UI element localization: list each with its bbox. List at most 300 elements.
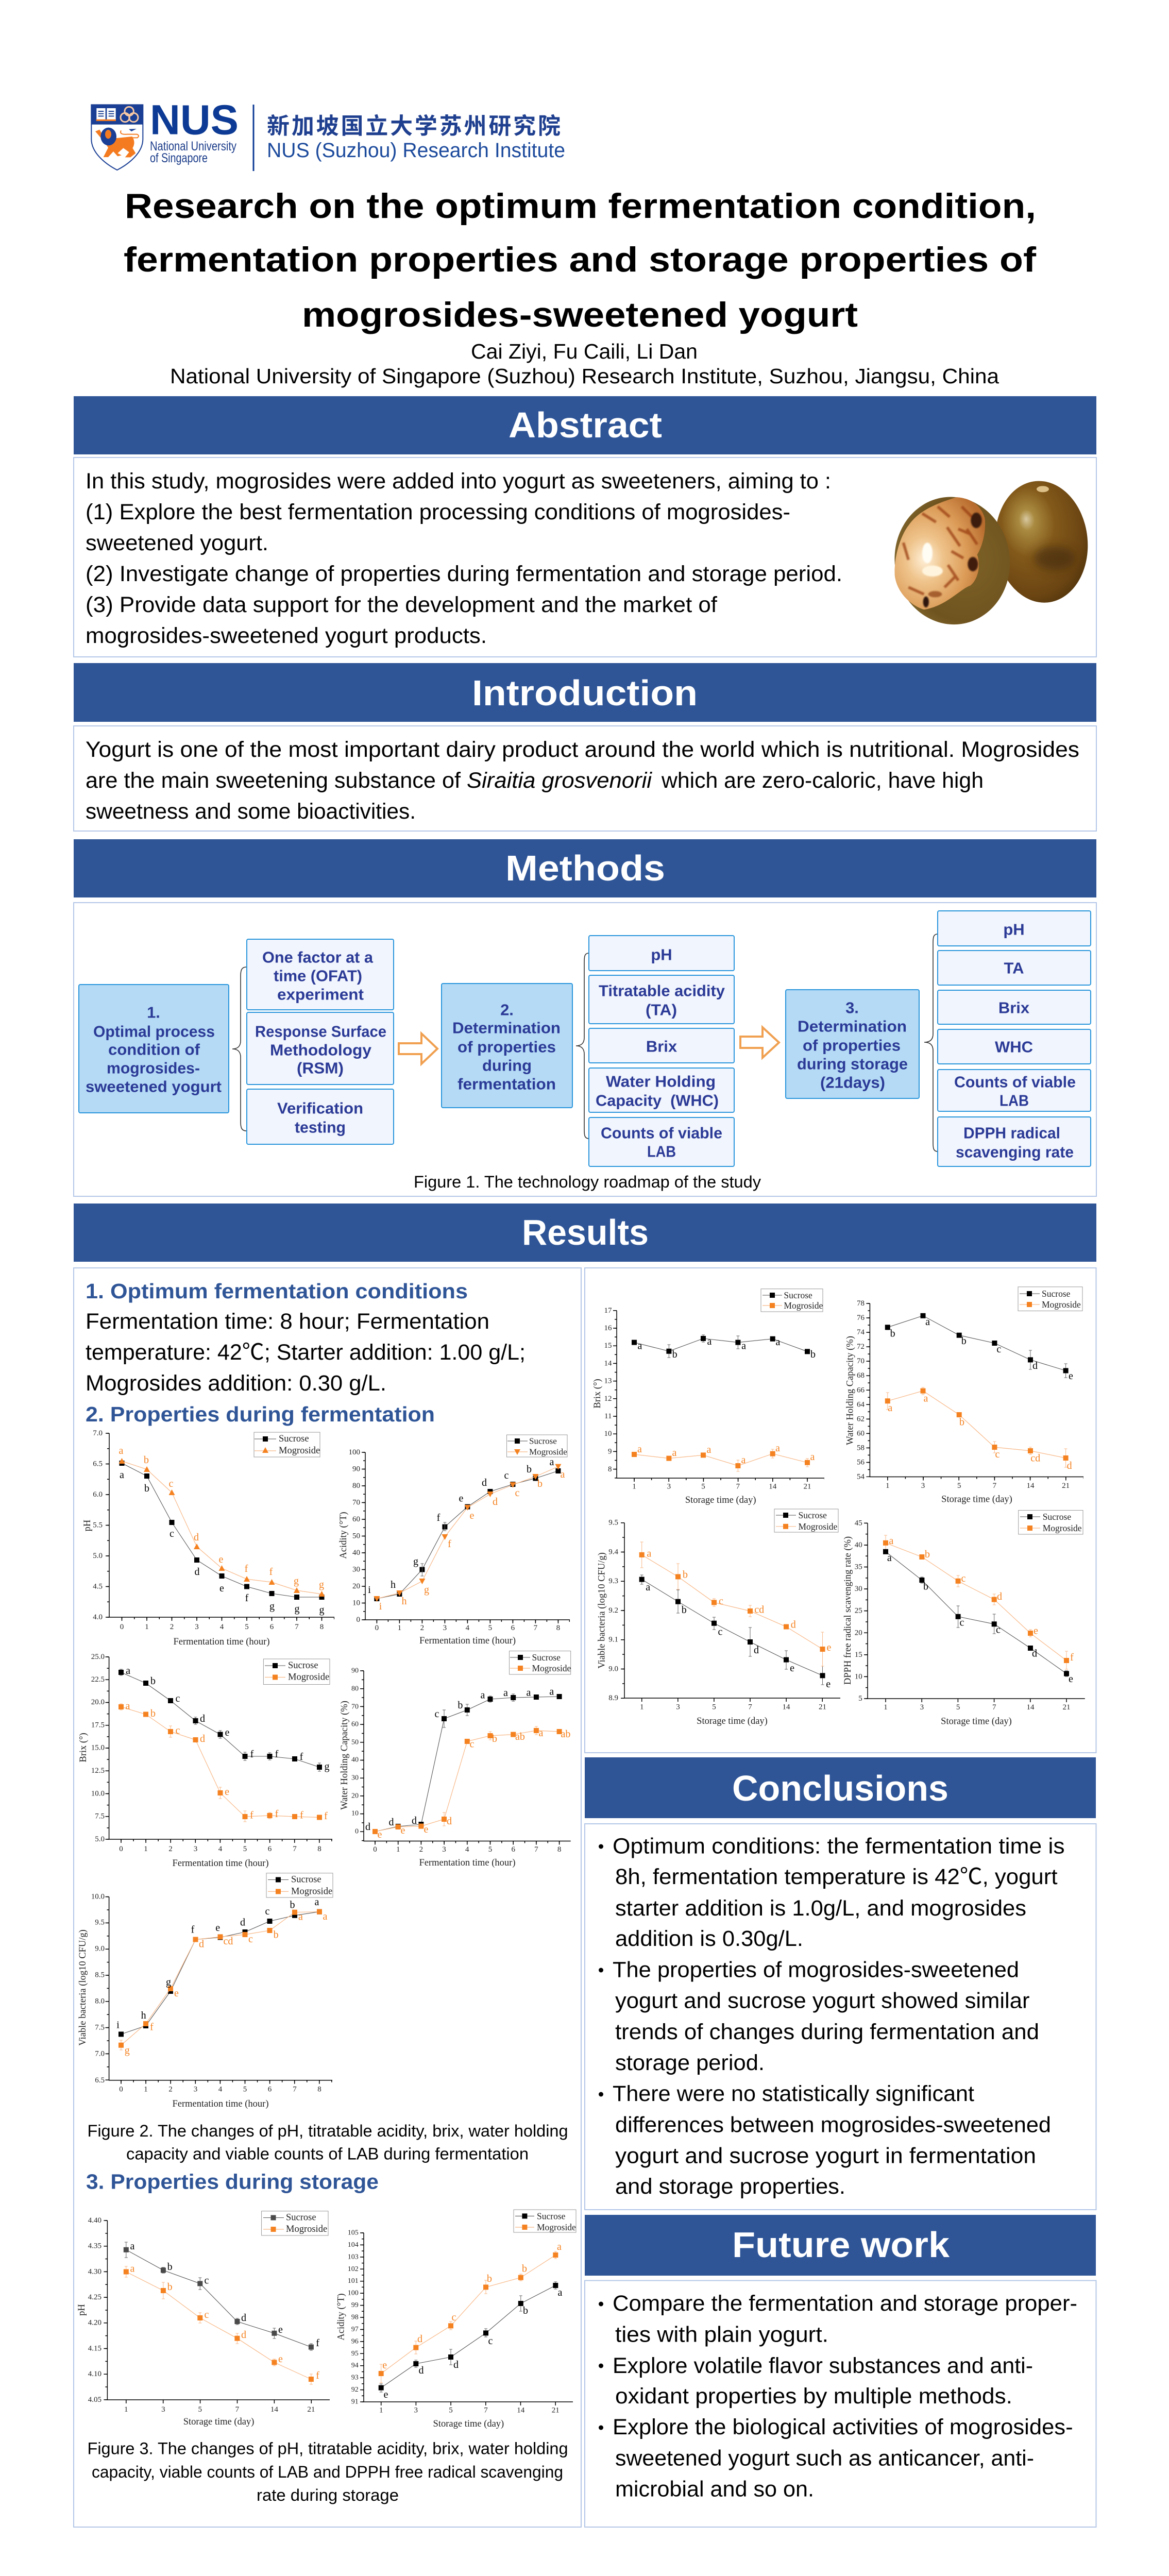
significance letters: c (265, 1906, 270, 1917)
axis labels: 5 (858, 1694, 862, 1703)
axis labels: 4 (218, 2086, 223, 2094)
significance letters: c (452, 2312, 456, 2323)
significance letters: b (167, 2281, 173, 2293)
chart: viable bacteria during fermentation (78, 1873, 333, 2109)
axis labels: 4 (466, 1624, 470, 1632)
axis labels: 7 (295, 1623, 299, 1631)
axis labels: 14 (604, 1359, 612, 1367)
axis labels: 4 (465, 1845, 469, 1854)
significance letters: g (295, 1603, 300, 1615)
axis labels: 10.0 (91, 1790, 105, 1798)
flow box 1: optimal process condition: mogrosides- (107, 1059, 200, 1077)
future work bullet list: Explore the biological activities of mogrosides- (613, 2415, 1073, 2439)
axis labels: 22.5 (91, 1675, 105, 1684)
axis labels: 80 (352, 1482, 360, 1490)
axis labels: DPPH free radical scavenging rate (%) (843, 1536, 853, 1685)
future work bullet list: Explore volatile flavor substances and anti- (613, 2353, 1033, 2378)
axis labels: 6 (268, 2086, 272, 2094)
chart: DPPH radical scavenging rate during storage (843, 1511, 1085, 1727)
significance letters: a (315, 1896, 319, 1908)
mogroside series (888, 1391, 1066, 1458)
flow box 1: optimal process condition: sweetened yogurt (86, 1078, 222, 1095)
axis labels: 68 (857, 1371, 865, 1380)
axis labels: 5.5 (93, 1521, 103, 1529)
box: water holding capacity (589, 1068, 734, 1112)
axis labels: 98 (351, 2313, 359, 2321)
axis labels: 25.0 (91, 1653, 105, 1661)
significance letters: a (557, 2241, 562, 2252)
legend: Mogroside (799, 1521, 838, 1532)
sucrose series (642, 1580, 822, 1675)
axis labels: 72 (857, 1343, 865, 1351)
axis labels (597, 1519, 826, 1726)
figure 3 caption: rate during storage (257, 2486, 399, 2504)
axis labels: 58 (857, 1444, 865, 1452)
significance letters: c (176, 1693, 180, 1704)
significance letters: c (960, 1617, 964, 1629)
conclusions bullet list: and storage properties. (615, 2174, 845, 2199)
conclusions bullet list: yogurt and sucrose yogurt showed similar (615, 1989, 1029, 2013)
axis labels: 14 (1026, 1703, 1035, 1711)
axis labels: 30 (855, 1585, 862, 1593)
significance letters: b (492, 1733, 497, 1744)
legend (263, 1659, 330, 1685)
significance letters: d (241, 2329, 246, 2341)
axis labels: 1 (640, 1703, 643, 1711)
axis labels: 17 (604, 1307, 612, 1315)
axis labels: 70 (857, 1357, 865, 1365)
significance letters: a (638, 1341, 642, 1352)
axis labels: 6.5 (95, 2076, 105, 2084)
icon: luo han guo fruit (886, 477, 1094, 632)
axis labels: Fermentation time (hour) (419, 1636, 516, 1646)
significance letters: a (549, 1686, 554, 1697)
axis labels (78, 1893, 321, 2109)
axis labels: 64 (857, 1400, 865, 1409)
significance letters (365, 1686, 570, 1840)
significance letters: c (435, 1708, 439, 1720)
significance letters: a (503, 1687, 508, 1699)
significance letters: f (250, 1749, 254, 1760)
significance letters: i (379, 1601, 382, 1612)
axis labels: Fermentation time (hour) (172, 2099, 269, 2109)
legend: Mogroside (537, 2222, 576, 2232)
significance letters (119, 1445, 325, 1616)
flow box 1: optimal process condition: Optimal process (93, 1022, 215, 1041)
significance letters: e (225, 1727, 230, 1738)
abstract text: (1) Explore the best fermentation processing conditions of mogrosides- (86, 500, 790, 524)
box: counts storage (938, 1070, 1091, 1111)
panel: Conclusions heading: Conclusions (732, 1768, 948, 1808)
axis labels: 8.5 (95, 1971, 105, 1979)
significance letters: b (150, 1675, 156, 1687)
box: Brix (589, 1028, 734, 1063)
flow box 3: determination during storage: (21days) (820, 1074, 885, 1091)
logo: NUS (Suzhou) Research Institute (91, 97, 565, 171)
axis labels: 100 (348, 2290, 359, 2297)
mogroside series (121, 1707, 319, 1818)
significance letters: i (368, 1584, 371, 1596)
axis labels: 12.5 (91, 1767, 105, 1775)
axis labels: pH (77, 2304, 87, 2316)
axis labels: 9.5 (95, 1919, 105, 1927)
flow box 2: determination during fermentation: fermentation (458, 1075, 556, 1093)
axis labels: 7 (993, 1482, 997, 1490)
box: DPPH storage: DPPH radical (963, 1124, 1060, 1142)
significance letters: a (775, 1443, 780, 1454)
axis labels: 4.35 (88, 2242, 101, 2250)
axis labels: 7 (484, 2406, 488, 2414)
axis labels: 60 (351, 1721, 359, 1728)
box: Response Surface Methodology: (RSM) (297, 1059, 344, 1077)
axis labels: 7 (736, 1483, 740, 1491)
figure 2 caption (88, 2122, 568, 2163)
axis labels: Storage time (day) (685, 1495, 756, 1505)
axis labels: 0 (120, 1623, 124, 1631)
panel: Results right column charts (585, 1268, 1096, 1753)
authors and affiliation: Cai Ziyi, Fu Caili, Li Dan (471, 340, 698, 363)
significance letters: cd (754, 1604, 764, 1616)
axis labels: 3 (194, 1845, 197, 1853)
axis labels: 3 (414, 2406, 418, 2414)
flow box 2: determination during fermentation: of properties (458, 1038, 556, 1056)
significance letters: d (388, 1817, 394, 1828)
axis labels: 14 (270, 2405, 278, 2414)
significance letters: a (887, 1552, 892, 1564)
axis labels: 8 (320, 1623, 324, 1631)
sucrose series (121, 1672, 319, 1767)
axis labels: Water Holding Capacity (%) (845, 1336, 855, 1445)
significance letters: b (522, 2263, 527, 2274)
legend: Mogroside (1043, 1523, 1082, 1533)
axis labels: 14 (517, 2406, 525, 2414)
axis labels: 9.1 (608, 1636, 618, 1644)
axis labels: 78 (857, 1299, 865, 1308)
legend (774, 1509, 838, 1532)
significance letters: b (144, 1454, 149, 1466)
significance letters: c (169, 1478, 174, 1489)
chart: water holding capacity during fermentation (340, 1651, 571, 1868)
axis labels: 2 (420, 1624, 424, 1632)
significance letters: a (637, 1444, 642, 1455)
axis labels: 2 (168, 1845, 173, 1853)
chart: acidity during storage (336, 2210, 576, 2429)
axis labels: 101 (348, 2277, 359, 2285)
significance letters: g (424, 1584, 429, 1596)
significance letters: f (150, 2022, 154, 2033)
significance letters: f (324, 1810, 328, 1822)
axis labels: 7.5 (95, 1812, 105, 1821)
axis labels (82, 1429, 324, 1647)
sucrose series (377, 1471, 558, 1599)
significance letters: e (827, 1642, 832, 1653)
conclusions bullet list: differences between mogrosides-sweetened (615, 2112, 1051, 2137)
axis labels: 1 (398, 1624, 401, 1632)
box: TA storage (938, 951, 1091, 985)
axis labels: 91 (351, 2398, 359, 2406)
conclusions bullet list: yogurt and sucrose yogurt in fermentation (615, 2144, 1036, 2168)
significance letters: c (248, 1934, 253, 1945)
significance letters: cd (224, 1936, 233, 1947)
mogroside series (381, 2255, 555, 2374)
flow box 1: optimal process condition: 1. (147, 1004, 160, 1021)
mogroside series (634, 1454, 807, 1466)
axis labels: 1 (396, 1845, 400, 1854)
heading: properties during fermentation: 2. Properties during fermentation (86, 1402, 435, 1426)
legend: Mogroside (288, 1672, 329, 1683)
axis labels: Acidity (°T) (336, 2293, 346, 2341)
axis labels: Water Holding Capacity (%) (340, 1701, 350, 1810)
flow box 2: determination during fermentation: Determination (452, 1019, 561, 1037)
axis labels: 3 (194, 2086, 197, 2094)
axis labels: 5 (449, 2406, 453, 2414)
conclusions bullet list: trends of changes during fermentation and (615, 2020, 1039, 2044)
axis labels: 2 (168, 2086, 173, 2094)
significance letters: e (278, 2353, 283, 2365)
axis labels: 62 (857, 1415, 865, 1423)
significance letters: ab (515, 1731, 525, 1742)
future work bullet list (599, 2291, 1077, 2502)
axis labels: 10.0 (91, 1893, 105, 1901)
conclusions bullet list: addition is 0.30g/L. (615, 1926, 803, 1951)
mogroside series (122, 1461, 321, 1594)
axis labels: 5.0 (95, 1835, 105, 1843)
abstract text: (2) Investigate change of properties during fermentation and storage period. (86, 562, 842, 586)
significance letters: c (205, 2275, 209, 2286)
box: OFAT experiment: One factor at a (262, 948, 374, 967)
axis labels: 3 (442, 1845, 446, 1854)
axis labels: Fermentation time (hour) (419, 1858, 516, 1868)
significance letters: cd (1030, 1453, 1040, 1464)
axis labels: 5 (956, 1703, 960, 1711)
axis labels: 99 (351, 2301, 359, 2309)
significance letters: d (240, 1917, 245, 1928)
legend: Sucrose (1042, 1289, 1071, 1299)
axis labels: Acidity (°T) (338, 1512, 349, 1559)
panel: Methods heading: Methods (505, 848, 665, 888)
legend (1019, 1511, 1083, 1534)
significance letters: e (219, 1583, 224, 1594)
flow box 3: determination during storage: Determination (798, 1017, 907, 1036)
significance letters: e (378, 1829, 382, 1840)
future work bullet list: Compare the fermentation and storage proper- (613, 2291, 1077, 2316)
axis labels: 7 (235, 2405, 240, 2414)
conclusions bullet list: Optimum conditions: the fermentation time is (613, 1834, 1064, 1859)
box: Response Surface Methodology: Response Surface (255, 1022, 386, 1041)
significance letters: a (888, 1402, 892, 1414)
flow box 1: optimal process condition (79, 985, 229, 1113)
legend: Sucrose (799, 1510, 827, 1520)
axis labels: 6.0 (93, 1490, 103, 1499)
axis labels: 20 (351, 1792, 359, 1800)
significance letters (637, 1336, 816, 1466)
legend: Sucrose (532, 1652, 561, 1663)
axis labels: Storage time (day) (433, 2419, 504, 2429)
box: Brix: Brix (646, 1038, 677, 1055)
sucrose series (634, 1338, 807, 1351)
axis labels: 8 (317, 2086, 321, 2094)
significance letters: b (523, 2305, 528, 2316)
significance letters: c (504, 1470, 509, 1481)
panel: Abstract heading: Abstract (509, 405, 662, 445)
axis labels: 0 (355, 1828, 359, 1835)
significance letters: a (120, 1469, 124, 1481)
significance letters: f (1070, 1652, 1074, 1663)
significance letters: b (150, 1708, 156, 1719)
box: counts storage: Counts of viable (954, 1073, 1076, 1091)
significance letters: h (402, 1596, 407, 1607)
axis labels: 16 (604, 1324, 612, 1332)
legend: Mogroside (529, 1447, 567, 1457)
text: optimum conditions (86, 1309, 526, 1396)
authors and affiliation (170, 340, 999, 388)
axis labels: 15 (855, 1651, 862, 1659)
axis labels: 8 (557, 1845, 561, 1854)
conclusions bullet list: starter addition is 1.0g/L, and mogrosides (615, 1896, 1026, 1921)
significance letters: c (488, 2335, 493, 2347)
box: TA storage: TA (1004, 959, 1024, 977)
significance letters: a (130, 2263, 135, 2274)
box: titratable acidity: (TA) (646, 1001, 677, 1019)
axis labels: 0 (119, 2086, 123, 2094)
panel: Abstract (74, 457, 1096, 657)
panel: Introduction heading: Introduction (472, 673, 698, 713)
mogroside series (121, 1912, 319, 2045)
axis labels: 35 (855, 1563, 862, 1571)
significance letters: c (719, 1596, 723, 1607)
axis labels: 3 (667, 1483, 671, 1491)
significance letters: c (996, 1624, 1001, 1636)
significance letters: e (401, 1825, 405, 1836)
significance letters (130, 2241, 319, 2381)
significance letters: a (646, 1582, 650, 1593)
box: counts of viable LAB: LAB (647, 1143, 676, 1160)
abstract text: sweetened yogurt. (86, 531, 268, 555)
significance letters: a (741, 1454, 746, 1466)
axis labels: 40 (855, 1541, 862, 1549)
significance letters (368, 1456, 565, 1612)
bracket 1 (232, 967, 246, 1131)
legend: Mogroside (1042, 1299, 1081, 1310)
significance letters: f (300, 1809, 303, 1821)
significance letters: b (527, 1464, 532, 1475)
axis labels: 3 (195, 1623, 199, 1631)
significance letters: a (130, 2241, 135, 2252)
bracket 3 (924, 934, 938, 1151)
axis labels: 8.9 (608, 1694, 618, 1702)
axis labels: 90 (352, 1465, 360, 1473)
axis labels: 54 (857, 1472, 865, 1481)
axis labels: 0 (375, 1624, 379, 1632)
significance letters: c (515, 1487, 520, 1499)
significance letters (382, 2241, 563, 2400)
significance letters: g (325, 1761, 330, 1772)
significance letters: f (316, 2337, 319, 2349)
significance letters: g (319, 1579, 324, 1590)
significance letters: d (241, 2312, 246, 2324)
axis labels: 60 (352, 1515, 360, 1523)
axis labels: 5 (701, 1483, 705, 1491)
axis labels: 7 (992, 1703, 996, 1711)
axis labels: 8 (317, 1845, 321, 1853)
National University of Singapore text (150, 139, 236, 165)
heading: optimum fermentation conditions: 1. Optimum fermentation conditions (86, 1279, 468, 1303)
axis labels: 1 (144, 1845, 148, 1853)
flow box 3: determination during storage: of properties (803, 1037, 901, 1054)
axis labels: 2 (170, 1623, 174, 1631)
significance letters: h (141, 2010, 146, 2021)
significance letters: b (290, 1899, 295, 1910)
flow box 1: optimal process condition: condition of (108, 1041, 200, 1058)
axis labels: Fermentation time (hour) (172, 1858, 269, 1869)
significance letters: b (925, 1549, 930, 1560)
axis labels: 10 (855, 1672, 862, 1681)
axis labels: 1 (144, 2086, 148, 2094)
conclusions bullet list (599, 1834, 1064, 2199)
axis labels: 90 (351, 1667, 359, 1674)
flow box 3: determination during storage (786, 990, 919, 1098)
figure 2 caption: Figure 2. The changes of pH, titratable acidity, brix, water holding (88, 2122, 568, 2140)
significance letters: c (176, 1725, 180, 1736)
axis labels: 97 (351, 2326, 359, 2333)
axis labels: 4.15 (88, 2345, 101, 2353)
significance letters: g (319, 1604, 325, 1616)
axis labels: 76 (857, 1314, 865, 1322)
abstract text: (3) Provide data support for the development and the market of (86, 592, 718, 617)
text: optimum conditions: temperature: 42℃; Starter addition: 1.00 g/L; (86, 1340, 526, 1365)
box: WHC storage: WHC (995, 1038, 1033, 1056)
axis labels: 11 (604, 1412, 612, 1420)
axis labels: 7 (748, 1703, 752, 1711)
box: counts of viable LAB (589, 1117, 734, 1166)
axis labels: 5.0 (93, 1552, 103, 1560)
significance letters: d (1032, 1360, 1038, 1371)
axis labels: 3 (921, 1482, 925, 1490)
introduction text: Yogurt is one of the most important dairy product around the world which is nutritional. Mogrosides (86, 737, 1079, 762)
significance letters: d (997, 1591, 1002, 1602)
significance letters: d (200, 1713, 205, 1724)
English institute name: NUS (Suzhou) Research Institute (267, 139, 565, 162)
significance letters: a (550, 1456, 554, 1468)
conclusions bullet list: The properties of mogrosides-sweetened (613, 1958, 1019, 1982)
significance letters: b (537, 1478, 543, 1489)
significance letters: a (126, 1665, 130, 1676)
conclusions bullet list: storage period. (615, 2050, 765, 2075)
axis labels: 9.4 (608, 1548, 618, 1556)
box: DPPH storage: scavenging rate (956, 1143, 1074, 1161)
box: verification testing: Verification (277, 1099, 363, 1117)
abstract text: mogrosides-sweetened yogurt products. (86, 623, 487, 648)
significance letters (888, 1316, 1073, 1471)
significance letters: d (365, 1821, 370, 1833)
significance letters: f (437, 1512, 441, 1523)
mogroside series (642, 1555, 822, 1649)
panel: Future work heading: Future work (732, 2225, 950, 2265)
legend: Mogroside (291, 1886, 332, 1896)
axis labels: Viable bacteria (log10 CFU/g) (597, 1552, 607, 1669)
axis labels: Storage time (day) (697, 1716, 768, 1726)
significance letters: d (1032, 1648, 1037, 1659)
significance letters: a (561, 1469, 565, 1480)
axis labels: pH (82, 1520, 93, 1531)
box: OFAT experiment: experiment (277, 985, 364, 1004)
axis labels: 3 (443, 1624, 447, 1632)
box: DPPH storage (938, 1117, 1091, 1166)
significance letters: f (448, 1538, 451, 1550)
significance letters: c (718, 1626, 723, 1637)
significance letters: a (924, 1393, 928, 1404)
axis labels: 9.3 (608, 1577, 618, 1585)
